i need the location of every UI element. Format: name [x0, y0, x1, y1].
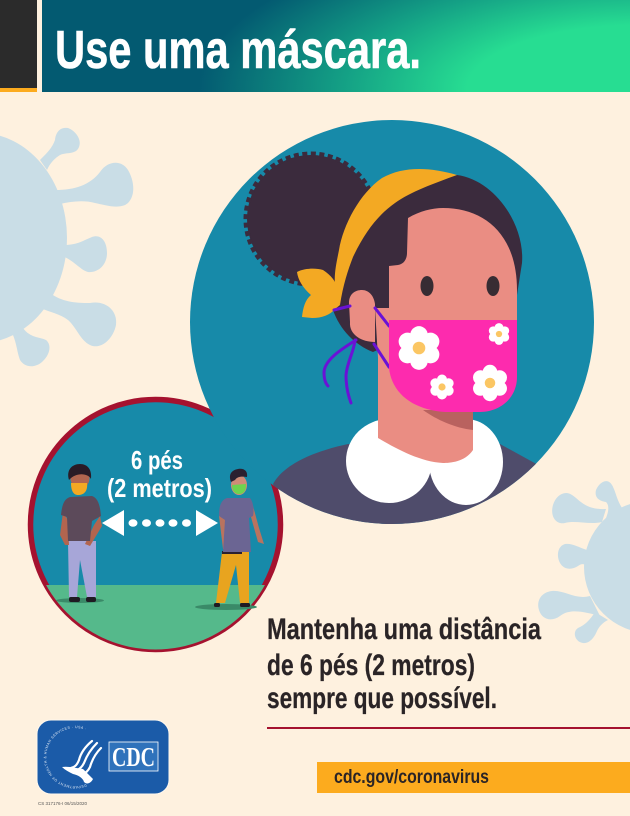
virus: right decoration [538, 481, 630, 643]
trousers [68, 541, 96, 597]
mask [71, 483, 87, 495]
header banner [0, 0, 630, 92]
HHS ring text: DEPARTMENT OF HEALTH & HUMAN SERVICES · USA · [44, 726, 87, 788]
url bar: cdc.gov/coronavirus [334, 766, 489, 788]
shirt [61, 496, 101, 541]
person right [195, 469, 264, 610]
eagle [62, 741, 101, 783]
distance arrow [102, 510, 218, 536]
dress [273, 444, 536, 524]
head [70, 467, 90, 489]
hair [333, 175, 522, 352]
head [231, 475, 247, 495]
person left [56, 464, 104, 603]
mask [232, 484, 246, 494]
CDC box: CDC [112, 742, 155, 772]
neck shadow [423, 410, 473, 430]
trousers [216, 552, 249, 603]
virus: left decoration [0, 128, 133, 366]
guidance text: sempre que possível. [267, 682, 497, 715]
collar [346, 419, 503, 505]
flowers [399, 323, 509, 401]
distance circle [28, 400, 284, 653]
neck [378, 340, 473, 463]
eyes [420, 276, 500, 296]
publication code: CS 317176-I 06/15/2020 [38, 801, 88, 806]
guidance text: Mantenha uma distância [267, 613, 541, 646]
logo: HHS and CDC [36, 720, 170, 794]
face [375, 208, 517, 358]
hair bun [246, 154, 376, 284]
guidance text: de 6 pés (2 metros) [267, 649, 475, 682]
ear [349, 290, 375, 342]
shirt [219, 498, 254, 552]
mask straps [324, 306, 389, 403]
arms [219, 506, 264, 549]
ground [46, 585, 265, 650]
guidance text [267, 613, 541, 715]
arms [60, 512, 102, 546]
distance label [107, 445, 212, 503]
headband [297, 169, 457, 318]
url bar [317, 762, 630, 793]
headband bow [297, 269, 340, 318]
title: Use uma máscara. [55, 20, 421, 80]
distance label: (2 metros) [107, 473, 212, 503]
main portrait circle [190, 120, 594, 540]
face mask [389, 320, 517, 412]
distance label: 6 pés [131, 445, 183, 475]
